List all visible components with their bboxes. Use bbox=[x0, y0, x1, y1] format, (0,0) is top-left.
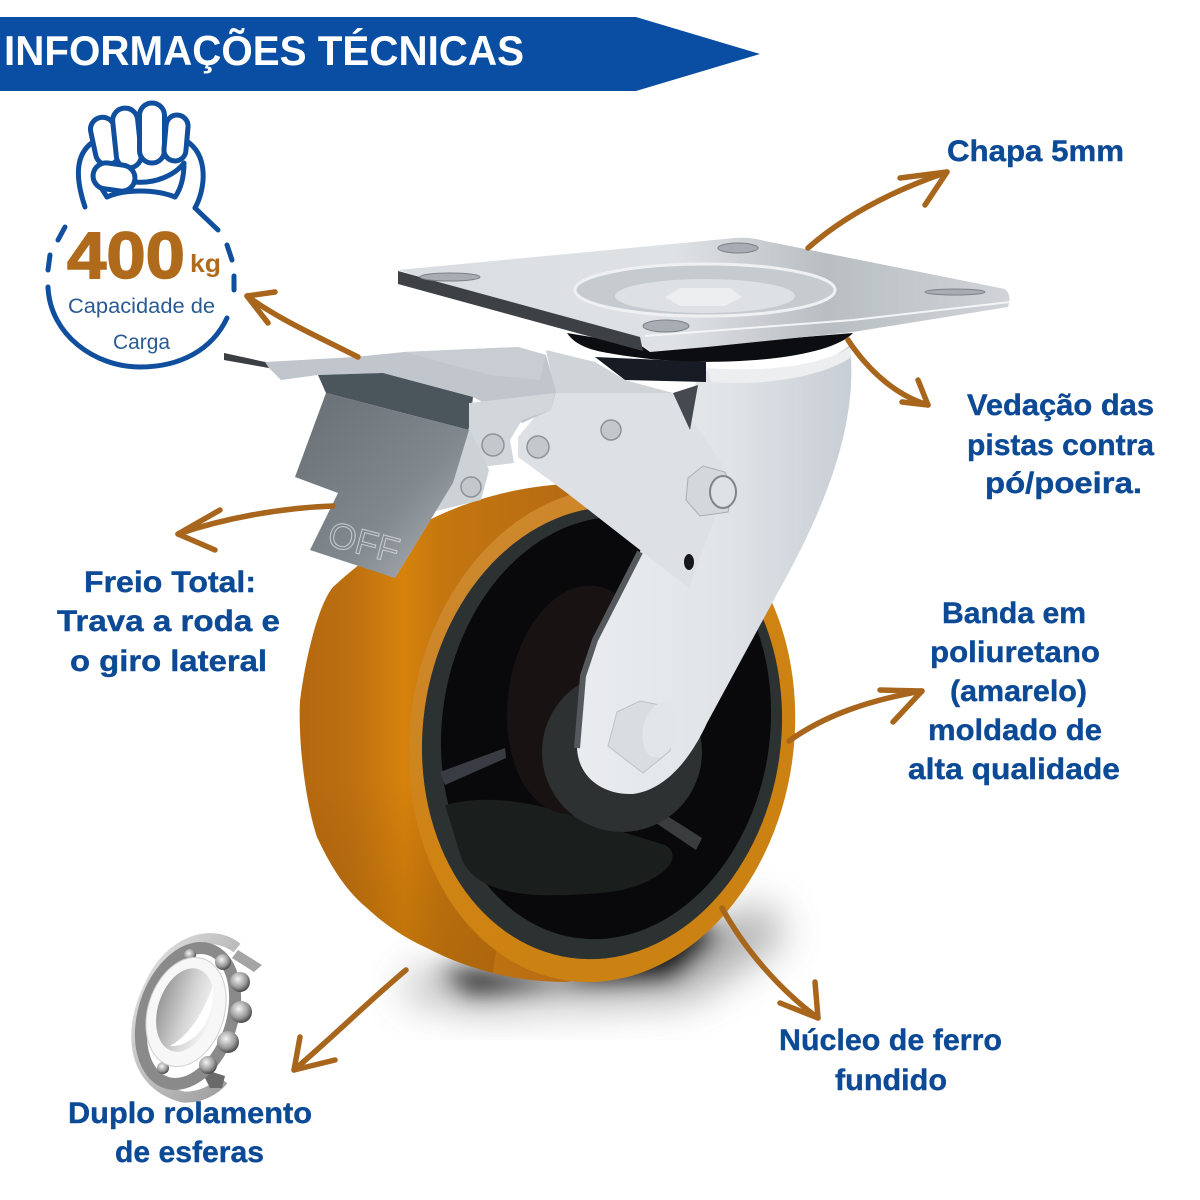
label: seal: pistas contra bbox=[967, 429, 1154, 462]
plate emboss bbox=[575, 264, 835, 316]
plate gusset bbox=[673, 385, 698, 430]
label: tread: (amarelo) bbox=[950, 675, 1087, 708]
side plate bbox=[518, 393, 722, 588]
icon: fist bbox=[78, 103, 218, 230]
capacity value: 400 bbox=[67, 218, 185, 292]
label: brake bbox=[57, 566, 280, 678]
label: tread: Banda em bbox=[942, 597, 1086, 630]
arrow: tread bbox=[789, 690, 922, 741]
hub ring bbox=[542, 672, 702, 832]
arrow: capacity bbox=[247, 292, 358, 357]
label: iron core: Núcleo de ferro bbox=[779, 1024, 1002, 1057]
header banner bbox=[0, 17, 760, 91]
fork crown weld bbox=[706, 345, 853, 383]
outer race bbox=[137, 939, 237, 1097]
header banner: INFORMAÇÕES TÉCNICAS bbox=[4, 26, 524, 74]
tread shading bbox=[300, 760, 520, 973]
plate edge highlight bbox=[645, 302, 1010, 336]
mounting plate dark edge bbox=[398, 271, 643, 351]
label: iron core: fundido bbox=[835, 1064, 947, 1097]
label: brake: Trava a roda e bbox=[57, 605, 280, 638]
inner race bbox=[133, 947, 239, 1077]
arrow: bearing bbox=[294, 970, 406, 1070]
lower web bbox=[445, 800, 673, 895]
label: seal bbox=[967, 389, 1154, 500]
capacity badge bbox=[48, 103, 234, 367]
label: seal: Vedação das bbox=[967, 389, 1154, 422]
fork inner edge bbox=[577, 552, 640, 748]
lever dark edge bbox=[224, 353, 269, 368]
label: brake: o giro lateral bbox=[70, 645, 267, 678]
pedal mechanism shadow bbox=[318, 373, 473, 430]
brake top plate bbox=[224, 347, 556, 423]
mounting plate bbox=[398, 238, 1009, 352]
rivets bbox=[461, 420, 621, 497]
knuckle bbox=[469, 393, 555, 467]
label: tread bbox=[908, 597, 1120, 786]
race end lower bbox=[200, 1068, 225, 1088]
pedal bevel bbox=[395, 427, 489, 578]
hex bolt bbox=[665, 288, 742, 306]
lock nut bbox=[686, 466, 736, 516]
capacity unit: kg bbox=[190, 250, 221, 278]
polyurethane tread bbox=[300, 484, 760, 982]
ball cage bbox=[125, 936, 251, 1096]
label: tread: moldado de bbox=[928, 714, 1102, 747]
iron core interior bbox=[414, 495, 798, 961]
label: bearing bbox=[68, 1097, 312, 1169]
arrow: seal bbox=[848, 340, 928, 405]
race end upper bbox=[232, 950, 262, 972]
balls bbox=[157, 949, 252, 1074]
bore bbox=[146, 961, 224, 1059]
label: plate: Chapa 5mm bbox=[947, 135, 1124, 168]
capacity caption line 2: Carga bbox=[113, 331, 170, 354]
mounting holes bbox=[420, 243, 985, 332]
OFF marking: OFF bbox=[324, 513, 404, 571]
label: tread: poliuretano bbox=[930, 636, 1100, 669]
brake pedal bbox=[295, 393, 469, 578]
axle bolt bbox=[608, 699, 682, 773]
grease hole bbox=[684, 554, 694, 570]
inner hub bbox=[493, 576, 667, 824]
plate upper face bbox=[404, 347, 546, 380]
arrow: brake bbox=[178, 506, 333, 550]
swivel seal bbox=[567, 333, 853, 362]
left spoke bbox=[440, 748, 506, 785]
badge ring bbox=[48, 227, 234, 367]
label: iron core bbox=[779, 1024, 1002, 1097]
raceway shadow bbox=[595, 357, 706, 382]
caster wheel bbox=[224, 238, 1010, 1007]
ball bearing bbox=[125, 936, 262, 1097]
arrow: plate thickness bbox=[808, 172, 947, 248]
label: bearing: Duplo rolamento bbox=[68, 1097, 312, 1130]
capacity caption line 1: Capacidade de bbox=[68, 295, 215, 318]
arrow: iron core bbox=[722, 908, 818, 1018]
wheel shadow bbox=[400, 905, 785, 1010]
label: bearing: de esferas bbox=[115, 1136, 264, 1169]
iron core rim bbox=[393, 483, 811, 983]
label: brake: Freio Total: bbox=[84, 566, 256, 599]
polyurethane face bbox=[377, 463, 827, 1007]
bracket upper band bbox=[546, 350, 673, 393]
label: seal: pó/poeira. bbox=[985, 467, 1142, 500]
right spoke bbox=[644, 805, 702, 850]
plate center dish bbox=[615, 279, 795, 313]
label: tread: alta qualidade bbox=[908, 753, 1120, 786]
fork arm bbox=[577, 345, 851, 794]
bore opening bbox=[170, 985, 214, 1046]
